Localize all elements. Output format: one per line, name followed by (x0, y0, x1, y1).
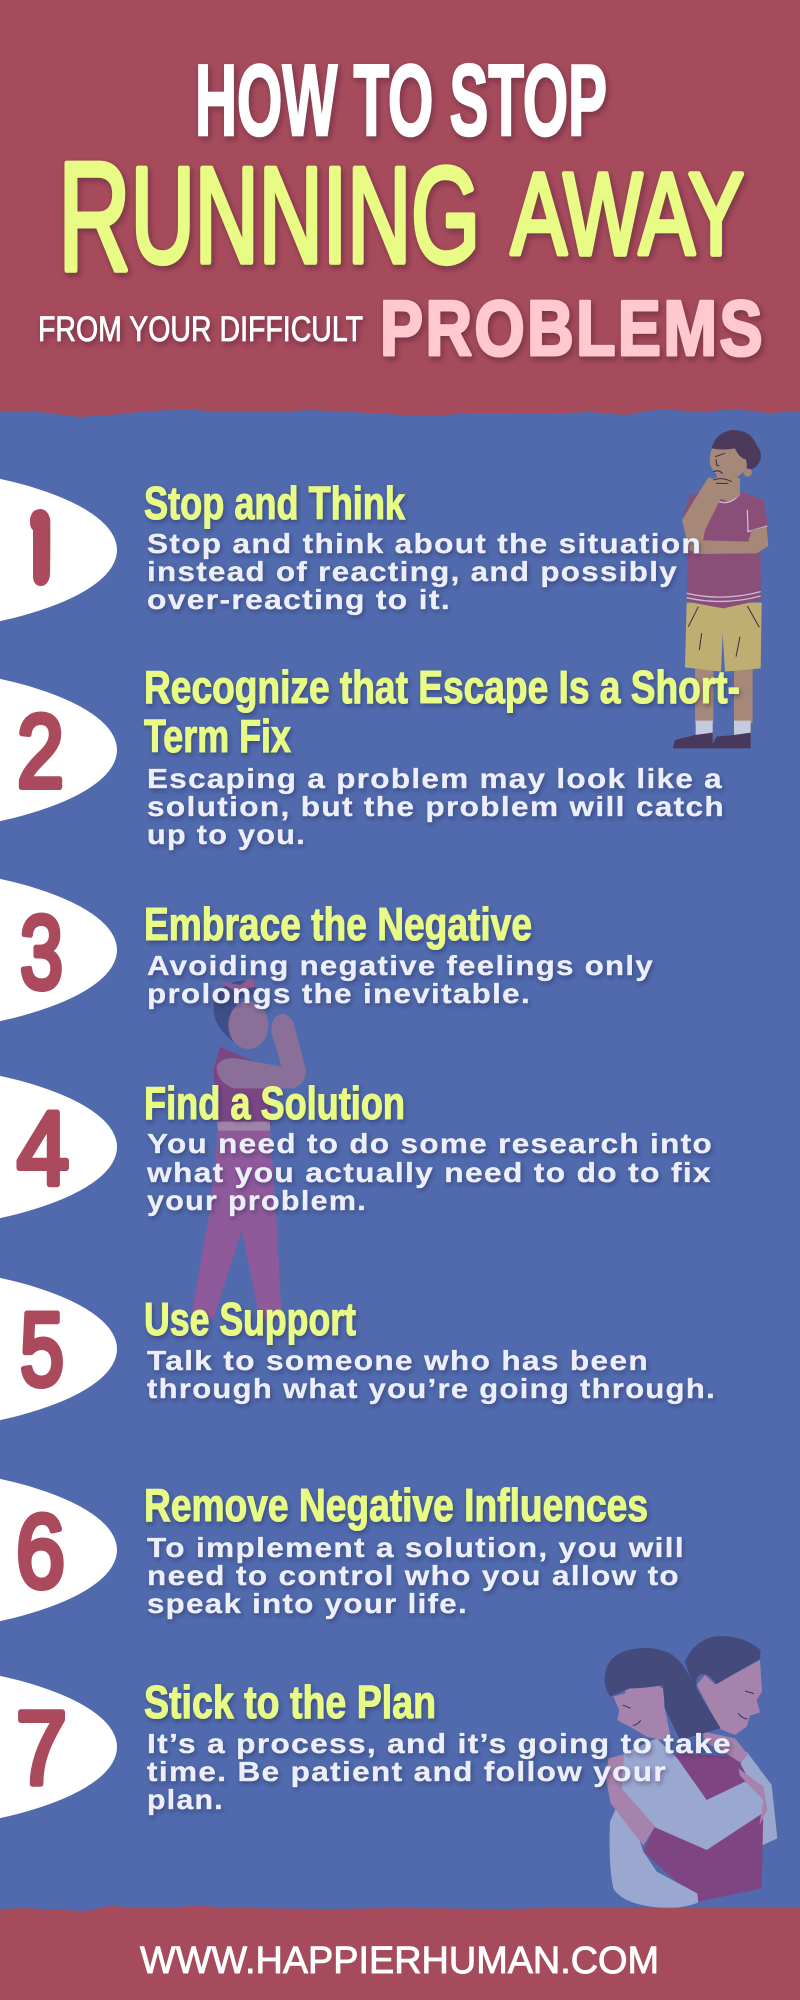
step 1 (0, 478, 703, 622)
header panel (0, 0, 800, 417)
step 5 oval and numeral: 5 (20, 1292, 64, 1408)
step 7 description: time. Be patient and follow your (147, 1756, 667, 1787)
step 5 oval and numeral (0, 1263, 117, 1435)
step 7 (0, 1661, 732, 1833)
step 4 oval and numeral: 4 (17, 1091, 69, 1207)
step 4 heading: Find a Solution (144, 1077, 405, 1129)
step 2 heading (144, 661, 740, 762)
step 1 description: instead of reacting, and possibly (147, 556, 678, 587)
title: running away: R (58, 130, 131, 303)
step 3 oval and numeral (0, 864, 117, 1036)
step 6 description: speak into your life. (147, 1588, 468, 1619)
step 5 description: Talk to someone who has been (147, 1345, 649, 1376)
step 3 description: prolongs the inevitable. (147, 978, 531, 1009)
step 7 oval and numeral: 7 (16, 1691, 67, 1807)
footer panel (0, 1906, 800, 2000)
step 7 description: It’s a process, and it’s going to take (147, 1728, 732, 1759)
step 2 oval and numeral: 2 (17, 694, 64, 810)
illustration: thinking boy (673, 430, 768, 748)
step 4 description: what you actually need to do to fix (146, 1157, 712, 1188)
step 4 description: You need to do some research into (147, 1128, 713, 1159)
step 7 description (147, 1728, 732, 1815)
step 6 (0, 1464, 685, 1636)
step 1 description (147, 528, 702, 615)
step 2 oval and numeral (0, 664, 117, 836)
step 7 description: plan. (147, 1784, 224, 1815)
step 7 oval and numeral (0, 1661, 117, 1833)
step 3 (0, 864, 654, 1036)
step 1 description: over-reacting to it. (147, 584, 451, 615)
step 5 description: through what you’re going through. (147, 1373, 716, 1404)
step 5 (0, 1263, 716, 1435)
step 4 description (146, 1128, 713, 1216)
step 7 heading: Stick to the Plan (144, 1676, 436, 1728)
illustration: two people hugging (605, 1636, 777, 1908)
step 6 heading: Remove Negative Influences (144, 1479, 648, 1531)
subtitle: from your difficult: FROM YOUR DIFFICULT (38, 310, 363, 349)
step 3 description: Avoiding negative feelings only (147, 950, 654, 981)
step 4 oval and numeral (0, 1061, 117, 1233)
step 2 description: Escaping a problem may look like a (147, 763, 723, 794)
step 3 heading: Embrace the Negative (144, 898, 532, 950)
step 2 description: up to you. (147, 819, 306, 850)
step 5 heading: Use Support (144, 1293, 356, 1345)
title: running away: UNNING (131, 139, 480, 291)
step 6 oval and numeral (0, 1464, 117, 1636)
step 2 description: solution, but the problem will catch (147, 791, 725, 822)
step 2 description (147, 763, 725, 850)
step 1 oval and numeral (0, 478, 117, 622)
step 1 oval and numeral: 1 (9, 490, 67, 606)
step 6 description: To implement a solution, you will (147, 1532, 685, 1563)
step 3 oval and numeral: 3 (20, 895, 63, 1011)
illustration: strong woman (192, 977, 306, 1320)
step 1 heading: Stop and Think (144, 477, 405, 529)
footer website address: WWW.HAPPIERHUMAN.COM (140, 1940, 659, 1982)
step 6 description: need to control who you allow to (147, 1560, 680, 1591)
step 4 (0, 1061, 713, 1233)
step 6 oval and numeral: 6 (16, 1494, 65, 1610)
step 6 description (147, 1532, 685, 1619)
step 4 description: your problem. (147, 1185, 367, 1216)
step 1 description: Stop and think about the situation (147, 528, 702, 559)
step 2 heading: Term Fix (144, 710, 291, 762)
step 2 (0, 661, 740, 850)
title: running away (58, 130, 744, 303)
step 3 description (147, 950, 654, 1009)
step 5 description (147, 1345, 716, 1404)
